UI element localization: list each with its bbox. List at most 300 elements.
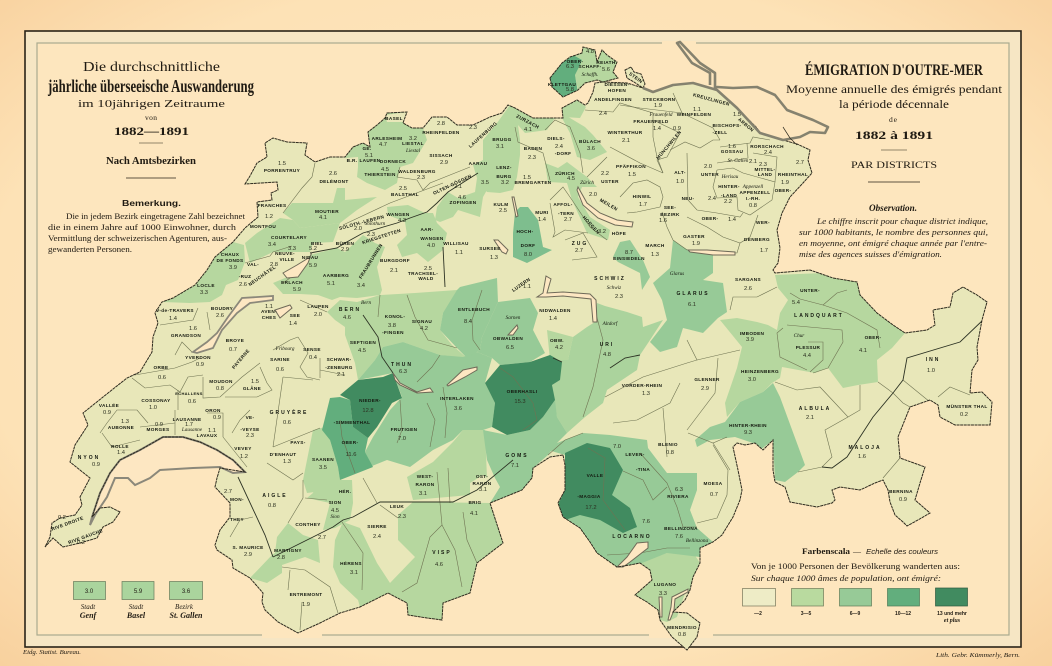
district labels: Bellinzona — [686, 538, 708, 544]
district labels: Lausanne — [181, 427, 203, 433]
district labels: 0.6 — [188, 399, 196, 405]
district labels: MEILEN — [599, 198, 619, 212]
district labels: 1.4 — [728, 217, 737, 223]
districts 13 per mille and more — [340, 355, 637, 533]
district labels: OBER- — [865, 335, 882, 340]
district labels: DIESSEN- — [605, 82, 630, 87]
district labels: 3.8 — [388, 323, 396, 329]
district labels: MOUTIER — [315, 209, 339, 214]
district labels: 1.7 — [639, 202, 647, 208]
district labels: 0.6 — [276, 367, 284, 373]
district labels: ALT- — [674, 170, 686, 175]
colour scale legend: —2 — [754, 611, 762, 617]
French title block — [786, 62, 1003, 182]
district labels: 1.1 — [455, 250, 463, 256]
district labels: 1.3 — [651, 252, 659, 258]
district labels: RIVE GAUCHE — [68, 528, 103, 545]
district labels: 2.4 — [599, 111, 608, 117]
district labels: 2.6 — [329, 171, 337, 177]
district labels: OBWALDEN — [493, 336, 523, 341]
district labels: 2.8 — [437, 121, 445, 127]
district labels: MARCH — [645, 243, 665, 248]
lake: Morat — [275, 305, 292, 318]
district labels: 4.2 — [420, 326, 428, 332]
district labels: HÉR. — [339, 487, 351, 494]
district labels: 0.9 — [673, 126, 681, 132]
district labels: DENBERG — [744, 237, 770, 242]
colour scale legend: Farbenscala — [802, 546, 851, 556]
district labels: Appenzell — [742, 184, 764, 190]
district labels: PAYS- — [290, 440, 306, 445]
district labels: 4.4 — [803, 353, 812, 359]
district labels: 4.5 — [567, 176, 575, 182]
district boundaries — [100, 93, 970, 630]
district labels: Zürich — [580, 180, 594, 186]
district labels: 0.8 — [666, 450, 674, 456]
district labels: 0.8 — [268, 503, 276, 509]
district labels: MON- — [230, 497, 244, 502]
swatch: 13 and more — [936, 588, 968, 606]
city rates boxes: Basel — [126, 611, 146, 620]
district labels: V-de-TRAVERS — [156, 308, 194, 313]
district labels: 2.7 — [796, 160, 804, 166]
district labels: BLENIO — [658, 442, 678, 447]
colour scale legend: et plus — [944, 618, 961, 624]
district labels: BOUDRY — [211, 306, 234, 311]
lake: Geneva — [90, 437, 245, 525]
district labels: THIERSTEIN — [364, 172, 396, 177]
district labels: 3.3 — [288, 246, 296, 252]
district labels: SCHAFF- — [578, 64, 602, 69]
district labels: ECHALLENS — [175, 391, 203, 396]
district labels: MÜNSTER THAL — [946, 403, 988, 409]
district labels: LAUPEN — [307, 304, 329, 309]
district labels: 6.3 — [675, 487, 683, 493]
district labels: ERLACH — [281, 280, 303, 285]
district labels: 5.8 — [566, 87, 574, 93]
city rates boxes — [74, 582, 203, 620]
colour scale legend: 13 und mehr — [937, 611, 967, 617]
district labels: 2.4 — [373, 534, 382, 540]
district labels: LAUFENBURG — [468, 121, 498, 149]
district labels: ARLESHEIM — [372, 136, 402, 141]
German title block: von — [145, 113, 157, 122]
district labels: 0.9 — [213, 415, 221, 421]
district labels: FRANCHES — [258, 203, 286, 208]
district labels: PFÄFFIKON — [616, 163, 646, 169]
district labels: 4.2 — [555, 345, 563, 351]
district labels: 8.4 — [464, 319, 473, 325]
lakes — [90, 187, 735, 620]
district labels: RARON — [473, 481, 492, 486]
lake: Lucerne — [537, 276, 597, 322]
district labels: 2.9 — [341, 247, 349, 253]
district labels: WINTERTHUR — [607, 130, 643, 135]
district labels: -LAND — [721, 193, 737, 198]
district labels: 7.6 — [642, 519, 650, 525]
district labels: GLENNER — [694, 377, 720, 382]
district labels: 1.3 — [490, 255, 498, 261]
district labels: NIEDER- — [359, 398, 381, 403]
district labels: 4.8 — [603, 352, 611, 358]
district labels: 2.4 — [708, 196, 717, 202]
district labels: 3.2 — [409, 136, 417, 142]
district labels: 2.2 — [724, 199, 732, 205]
district labels: VALLE — [587, 473, 603, 478]
district labels: 8.7 — [625, 250, 633, 256]
district labels: 2.3 — [759, 162, 767, 168]
divider ornament — [868, 181, 920, 183]
district labels: 1.4 — [289, 321, 298, 327]
French title block: la période décennale — [839, 97, 949, 111]
district labels: VAL- — [247, 262, 259, 267]
district labels: EINSIEDELN — [613, 256, 645, 261]
district labels: SOLOTH.-LEBERN — [338, 214, 385, 231]
district labels: -ZELL — [712, 130, 728, 135]
district labels: NEUVE- — [275, 251, 295, 256]
district labels: KULM — [494, 202, 508, 207]
lake: Zurich — [577, 187, 633, 227]
district labels: 1.6 — [858, 454, 866, 460]
district labels: -VEYSE — [240, 427, 260, 432]
district labels: Altdorf — [602, 320, 619, 327]
district labels: Schwiz — [607, 285, 621, 291]
district labels: VILLE — [279, 257, 295, 262]
district labels: CONTHEY — [295, 522, 321, 527]
lake: Brienz — [447, 367, 477, 386]
district labels: 2.7 — [224, 489, 232, 495]
French note: Le chiffre inscrit pour chaque district indique, — [816, 217, 988, 226]
district labels — [51, 49, 988, 638]
district labels: HINWIL — [633, 194, 651, 199]
district labels: BÜLACH — [579, 138, 601, 144]
district labels: LUGANO — [654, 582, 676, 587]
district labels: 1.4 — [169, 316, 178, 322]
district labels: WANGEN — [420, 236, 444, 241]
colour scale legend: 10—12 — [895, 611, 911, 617]
district labels: MENDRISIO — [667, 625, 697, 630]
district labels: RIVE DROITE — [51, 515, 84, 532]
district labels: 2.1 — [749, 159, 757, 165]
district labels: SEE — [290, 313, 300, 318]
district labels: 4.3 — [398, 218, 406, 224]
district labels: 2.3 — [246, 433, 254, 439]
district labels: 1.9 — [302, 602, 310, 608]
district labels: 0.7 — [229, 347, 237, 353]
district labels: 1.0 — [149, 405, 157, 411]
district labels: 4.1 — [859, 348, 867, 354]
district labels: ROLLE — [111, 444, 129, 449]
district labels: SENSE — [303, 347, 321, 352]
district labels: SIGNAU — [412, 319, 432, 324]
district labels: SISSACH — [429, 153, 453, 158]
district labels: MORGES — [147, 427, 169, 432]
district labels: NEUCHÂTEL — [247, 264, 277, 287]
district labels: WER- — [756, 220, 770, 225]
district labels: 1.1 — [693, 107, 701, 113]
district labels: 2.3 — [469, 125, 477, 131]
rhine mouth — [783, 127, 797, 145]
district labels: VALLÉE — [99, 401, 119, 408]
district labels: 3.5 — [319, 465, 327, 471]
district labels: VEVEY — [234, 446, 252, 451]
district labels: BURGDORF — [380, 258, 410, 263]
swatch: up to 2 — [742, 588, 776, 606]
colour scale legend: Sur chaque 1000 âmes de population, ont émigré: — [751, 574, 941, 583]
district labels: BADEN — [524, 146, 542, 151]
district labels: 2.6 — [216, 313, 224, 319]
district labels: THUN — [391, 362, 413, 368]
district labels: AFFOL- — [553, 202, 573, 207]
district labels: HORGEN — [582, 215, 601, 235]
swatch: 10 to 12 — [888, 588, 920, 606]
district labels: NEU- — [682, 196, 695, 201]
district labels: 0.8 — [749, 203, 757, 209]
district labels: 0.7 — [710, 492, 718, 498]
district labels: HINTER- — [718, 184, 740, 189]
district labels: SCHWIZ — [594, 276, 626, 282]
lake Constance — [643, 42, 828, 140]
district labels: 4.8 — [586, 49, 594, 55]
district labels: Fribourg — [275, 346, 295, 352]
district labels: MOUDON — [209, 379, 233, 384]
district labels: 0.9 — [92, 462, 100, 468]
district labels: MOESA — [704, 481, 723, 486]
lake: Neuchatel — [193, 296, 273, 353]
district labels: 1.5 — [278, 161, 286, 167]
district labels: BIEL — [311, 241, 323, 246]
district labels: COURTELARY — [271, 235, 307, 240]
district labels: 1.6 — [728, 144, 736, 150]
district labels: 1.2 — [265, 214, 273, 220]
district labels: BELLINZONA — [664, 526, 698, 531]
district labels: URI — [600, 342, 614, 348]
district labels: 6.3 — [399, 369, 407, 375]
districts 3 to 5 per mille — [163, 47, 905, 622]
swatch: 3 to 5 — [792, 588, 824, 606]
pale enclaves — [345, 112, 487, 483]
district labels: OBER- — [342, 440, 359, 445]
district labels: BRIG — [468, 500, 482, 505]
district labels: Sarnen — [506, 315, 521, 321]
district labels: 1.5 — [628, 172, 636, 178]
district labels: SARINE — [270, 357, 290, 362]
French note: mise des agences suisses d'émigration. — [799, 250, 942, 259]
district labels: 0.2 — [77, 540, 85, 546]
district labels: MONTFOU — [250, 224, 276, 229]
district labels: 9.3 — [744, 430, 752, 436]
district labels: GE. — [362, 146, 372, 151]
district labels: 6.3 — [566, 64, 574, 70]
district labels: MITTEL- — [755, 167, 776, 172]
district labels: OLTEN-GÖSGEN — [432, 173, 473, 196]
colour scale legend: 6—9 — [850, 611, 860, 617]
district labels: MÜNCHWILEN — [655, 129, 683, 160]
district labels: 1.6 — [659, 218, 667, 224]
lake: Maggiore — [617, 542, 648, 567]
district labels: UNTER — [701, 172, 719, 177]
district labels: 2.1 — [806, 415, 814, 421]
district labels: INN — [926, 357, 940, 363]
district labels: 2.9 — [244, 552, 252, 558]
district labels: 6.5 — [506, 345, 514, 351]
German title block: Nach Amtsbezirken — [106, 155, 196, 167]
district labels: 2.1 — [337, 372, 345, 378]
district labels: BASEL — [385, 116, 403, 121]
district labels: -SIMMENTHAL — [334, 420, 370, 425]
district labels: 4.6 — [435, 562, 443, 568]
district labels: 4.0 — [427, 243, 435, 249]
district labels: GOSSAU — [721, 149, 743, 154]
district labels: SIERRE — [367, 524, 387, 529]
district labels: Solothurn — [365, 221, 386, 227]
city rates boxes: 3.0 — [85, 589, 94, 595]
district labels: HEINZENBERG — [741, 369, 779, 374]
district labels: BEZIRK — [660, 212, 680, 217]
district labels: -RUZ — [239, 274, 251, 279]
district labels: 1.5 — [251, 379, 259, 385]
district labels: 2.1 — [454, 184, 462, 190]
district labels: HÖFE — [612, 230, 626, 236]
district labels: LEVEN- — [625, 452, 645, 457]
colour scale legend: Von je 1000 Personen der Bevölkerung wanderten aus: — [751, 562, 960, 571]
district labels: 0.4 — [309, 355, 318, 361]
district labels: Frauenfeld — [648, 111, 673, 118]
district labels: HOCH- — [516, 229, 534, 234]
district labels: SCHWAR- — [327, 357, 352, 362]
district labels: IMBODEN — [740, 331, 765, 336]
city rates boxes: St. Gallen — [170, 611, 203, 620]
district labels: 3.1 — [350, 570, 358, 576]
district labels: Herisau — [721, 174, 739, 180]
German title block — [47, 60, 254, 178]
district labels: Chur — [794, 333, 805, 339]
district labels: AVEN- — [261, 309, 277, 314]
district labels: 1.0 — [927, 368, 935, 374]
lake: Sarnen — [508, 325, 518, 335]
French title block: Moyenne annuelle des émigrés pendant — [786, 82, 1003, 96]
district labels: B.R. — [347, 158, 357, 163]
district labels: 3.1 — [496, 144, 504, 150]
district labels: COSSONAY — [141, 398, 171, 403]
district labels: OBER- — [702, 216, 719, 221]
district labels: 2.1 — [390, 268, 398, 274]
district labels: 5.6 — [602, 67, 610, 73]
district labels: 1.6 — [189, 326, 197, 332]
district labels: OBERHASLI — [507, 389, 537, 394]
district labels: 4.6 — [458, 195, 466, 201]
divider ornament — [126, 177, 176, 179]
district labels: 0.6 — [158, 375, 166, 381]
district labels: MURI — [535, 210, 549, 215]
district labels: 1.4 — [653, 126, 662, 132]
colour scale legend — [742, 546, 968, 624]
district labels: 0.9 — [899, 497, 907, 503]
district labels: 3.9 — [746, 337, 754, 343]
district labels: FRUTIGEN — [391, 427, 418, 432]
German note: die in einem Jahre auf 1000 Einwohner, durch — [48, 223, 236, 232]
district labels: TRACHSEL- — [408, 271, 438, 276]
district labels: 3.9 — [229, 265, 237, 271]
district labels: D'ENHAUT — [270, 452, 296, 457]
district labels: 2.8 — [277, 555, 285, 561]
district labels: 1.4 — [549, 316, 558, 322]
district labels: 1.1 — [523, 284, 531, 290]
city rates boxes: Stadt — [81, 603, 96, 611]
district labels: HOFEN — [608, 88, 626, 93]
district labels: GASTER — [683, 234, 705, 239]
district labels: WALDENBURG — [398, 169, 436, 174]
district labels: BRUGG — [492, 137, 512, 142]
box: Genf — [74, 582, 106, 600]
district labels: 7.0 — [398, 436, 406, 442]
district labels: OBW. — [550, 338, 564, 343]
lake: Lugano — [659, 589, 688, 620]
district labels: 3.4 — [357, 283, 366, 289]
publisher credit left: Eidg. Statist. Bureau. — [22, 649, 81, 656]
district labels: VORDER-RHEIN — [622, 383, 662, 388]
district labels: 5.2 — [309, 246, 317, 252]
district labels: 2.5 — [399, 186, 407, 192]
district labels: -TERN — [558, 211, 574, 216]
cantonal boundaries — [238, 173, 983, 557]
district labels: 2.0 — [704, 164, 712, 170]
district labels: CHAUX — [221, 252, 240, 257]
district labels: 11.6 — [346, 452, 356, 458]
district labels: WEST- — [417, 474, 433, 479]
district labels: FRAUBRUNNEN — [358, 243, 384, 280]
lake: Thun — [393, 373, 433, 393]
districts 10 to 12 per mille — [322, 55, 582, 480]
district labels: MALOJA — [848, 445, 882, 451]
district labels: CHES — [262, 315, 276, 320]
district labels: 2.0 — [354, 226, 362, 232]
district labels: 0.8 — [678, 632, 686, 638]
district labels: LIESTAL — [402, 141, 424, 146]
lake: Sempach — [494, 240, 508, 254]
district labels: -MAGGIA — [577, 494, 601, 499]
district labels: DELÉMONT — [319, 177, 349, 184]
district labels: 5.9 — [309, 263, 317, 269]
city rates boxes: Stadt — [129, 603, 144, 611]
district labels: 4.1 — [470, 511, 478, 517]
lake: Biel — [283, 252, 312, 278]
district labels: BERN — [339, 307, 361, 313]
district labels: KLETTGAU — [548, 82, 576, 87]
district labels: 2.3 — [367, 232, 375, 238]
district labels: 2.4 — [764, 150, 773, 156]
district labels: 5.1 — [327, 281, 335, 287]
district labels: 4.1 — [319, 215, 327, 221]
district labels: WEINFELDEN — [677, 112, 712, 117]
district labels: 5.9 — [293, 287, 301, 293]
district labels: 0.8 — [216, 386, 224, 392]
district labels: 0.6 — [283, 420, 291, 426]
district labels: 0.2 — [960, 412, 968, 418]
district labels: STECKBORN — [643, 97, 676, 102]
district labels: AIGLE — [262, 493, 288, 499]
district labels: 8.0 — [524, 252, 532, 258]
district labels: 3.1 — [419, 491, 427, 497]
colour scale legend: Echelle des couleurs — [866, 549, 939, 556]
district labels: 2.3 — [528, 155, 536, 161]
German note — [48, 199, 246, 254]
French note — [799, 203, 988, 259]
district labels: 3.1 — [479, 487, 487, 493]
lake: Walensee — [688, 250, 735, 255]
district labels: 6.1 — [688, 302, 696, 308]
district labels: 3.6 — [587, 146, 595, 152]
